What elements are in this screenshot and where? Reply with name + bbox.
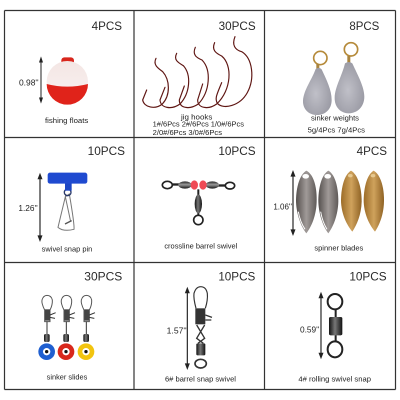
caption: sinker weights xyxy=(311,116,360,123)
icon: rolling swivel xyxy=(328,294,342,357)
caption: 4# rolling swivel snap xyxy=(298,377,371,384)
caption: jig hooks xyxy=(180,114,213,121)
panel: sinker slides xyxy=(5,263,133,388)
caption: swivel snap pin xyxy=(42,247,92,254)
dimension arrow xyxy=(319,293,323,358)
dimension label: 1.06'' xyxy=(273,202,292,211)
size list xyxy=(153,122,245,137)
dimension arrow xyxy=(291,172,295,234)
size list: 1#/6Pcs 2#/6Pcs 1/0#/6Pcs xyxy=(153,122,245,129)
dimension arrow xyxy=(38,174,42,240)
icon: two sinkers xyxy=(303,43,364,115)
icon: red sinker slide xyxy=(58,295,75,360)
dimension label: 1.26'' xyxy=(18,204,38,213)
dimension arrow xyxy=(40,58,42,102)
panel: swivel snap pin xyxy=(5,140,133,262)
quantity: 4PCS xyxy=(357,144,387,158)
caption: crossline barrel swivel xyxy=(164,244,238,251)
dimension label: 0.59'' xyxy=(300,325,320,334)
icon: three-way swivel xyxy=(162,180,235,225)
caption: spinner blades xyxy=(314,246,364,253)
icon: red and white float xyxy=(47,57,88,105)
icon: five hooks xyxy=(143,37,252,108)
quantity: 8PCS xyxy=(349,19,379,33)
quantity: 10PCS xyxy=(349,270,387,284)
icon: barrel snap swivel xyxy=(194,287,212,368)
quantity: 30PCS xyxy=(219,19,256,33)
icon: blue snap pin xyxy=(48,173,87,230)
caption: sinker slides xyxy=(47,374,88,381)
quantity: 4PCS xyxy=(92,19,122,33)
dimension arrow xyxy=(186,288,189,368)
quantity: 10PCS xyxy=(218,270,255,284)
icon: blue sinker slide xyxy=(38,295,56,360)
panel: fishing floats xyxy=(5,11,133,136)
size list: 2/0#/6Pcs 3/0#/6Pcs xyxy=(153,130,223,137)
panel: barrel snap swivel xyxy=(135,263,260,388)
size list: 5g/4Pcs 7g/4Pcs xyxy=(308,127,366,134)
panel: spinner blades xyxy=(267,140,395,262)
caption: fishing floats xyxy=(45,118,89,125)
quantity: 10PCS xyxy=(218,144,256,158)
dimension label: 1.57'' xyxy=(167,326,187,335)
panel: rolling swivel snap xyxy=(267,263,395,388)
quantity: 10PCS xyxy=(88,144,125,158)
dimension label: 0.98'' xyxy=(19,78,39,87)
icon: four spinner blades xyxy=(296,171,384,233)
panel: crossline barrel swivel xyxy=(135,140,260,262)
panel: sinker weights xyxy=(267,11,395,136)
icon: yellow sinker slide xyxy=(78,295,95,360)
panel: jig hooks xyxy=(135,11,260,137)
caption: 6# barrel snap swivel xyxy=(165,377,236,384)
quantity: 30PCS xyxy=(84,270,122,284)
